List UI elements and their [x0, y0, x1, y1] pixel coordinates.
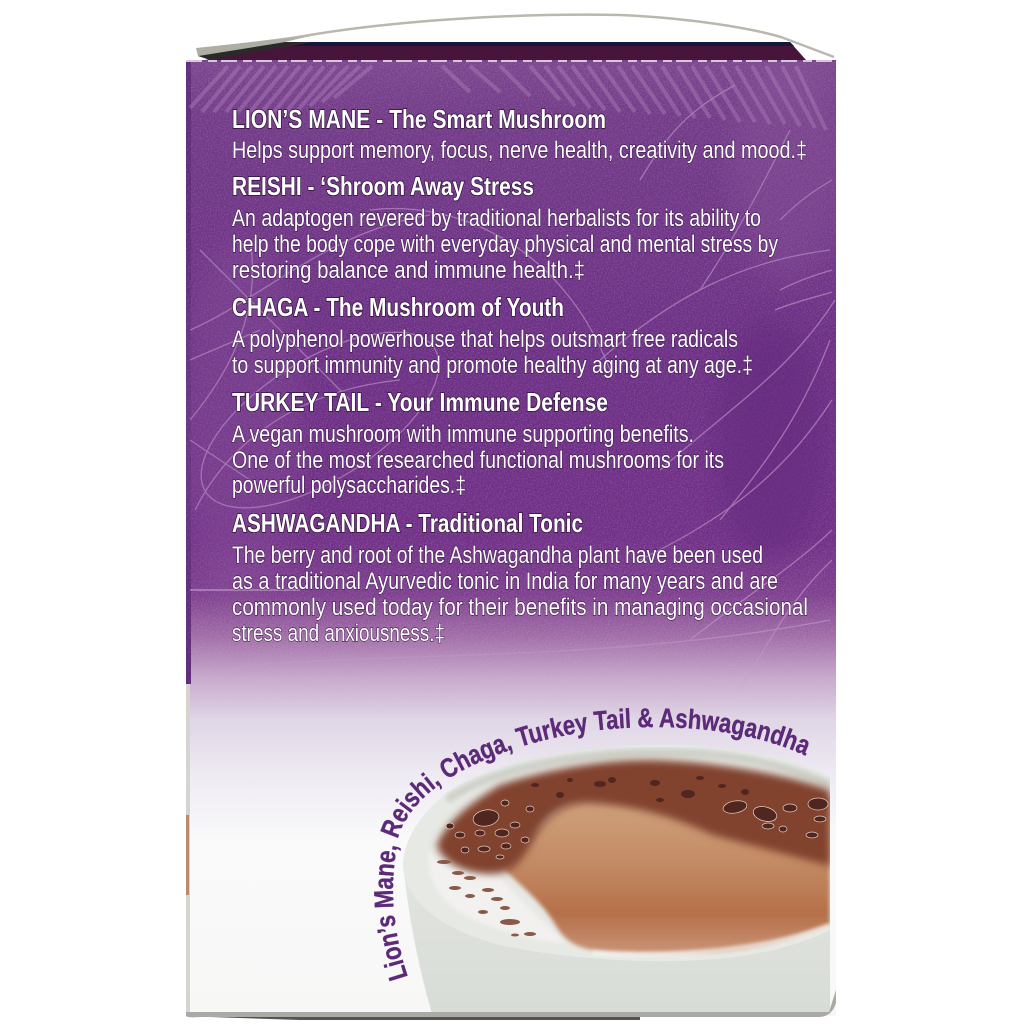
ingredient text	[232, 104, 808, 647]
bubbles	[446, 776, 828, 859]
Reishi body: restoring balance and immune health.‡	[232, 257, 585, 284]
Turkey Tail body: One of the most researched functional mushrooms for its	[232, 447, 724, 474]
background swirl pattern	[174, 60, 850, 702]
Chaga body: A polyphenol powerhouse that helps outsmart free radicals	[232, 326, 738, 353]
Ashwagandha body: The berry and root of the Ashwagandha plant have been used	[232, 542, 763, 569]
curved ingredient label: Lion’s Mane, Reishi, Chaga, Turkey Tail & Ashwagandha	[374, 708, 809, 982]
Chaga heading: CHAGA - The Mushroom of Youth	[232, 292, 564, 322]
Reishi body	[232, 205, 779, 284]
rim top shadow	[447, 752, 830, 800]
Ashwagandha body: stress and anxiousness.‡	[232, 620, 445, 647]
cup body	[404, 776, 830, 1014]
Turkey Tail body: A vegan mushroom with immune supporting benefits.	[232, 421, 694, 448]
cup	[403, 745, 832, 1014]
froth bubbles	[437, 860, 536, 936]
milk froth	[430, 856, 560, 941]
box top flap	[196, 15, 834, 60]
Turkey Tail body	[232, 421, 724, 499]
Ashwagandha body: as a traditional Ayurvedic tonic in India for many years and are	[232, 568, 778, 595]
cup rim	[403, 745, 830, 961]
box back panel	[186, 60, 836, 1016]
Lion's Mane heading: LION’S MANE - The Smart Mushroom	[232, 104, 606, 134]
coffee surface	[505, 796, 830, 953]
Reishi heading: REISHI - ‘Shroom Away Stress	[232, 171, 534, 201]
box bottom edge	[186, 990, 836, 1020]
Chaga body: to support immunity and promote healthy aging at any age.‡	[232, 352, 753, 379]
Lion's Mane body: Helps support memory, focus, nerve health, creativity and mood.‡	[232, 137, 807, 164]
Reishi body: An adaptogen revered by traditional herbalists for its ability to	[232, 205, 761, 232]
Ashwagandha body: commonly used today for their benefits in managing occasional	[232, 594, 808, 621]
cup rim highlight	[593, 925, 830, 954]
Ashwagandha body	[232, 542, 808, 647]
Chaga body	[232, 326, 753, 379]
Ashwagandha heading: ASHWAGANDHA - Traditional Tonic	[232, 508, 583, 538]
Reishi body: help the body cope with everyday physical and mental stress by	[232, 231, 779, 258]
Turkey Tail body: powerful polysaccharides.‡	[232, 472, 466, 499]
dark foam ring	[437, 760, 830, 874]
Turkey Tail heading: TURKEY TAIL - Your Immune Defense	[232, 387, 608, 417]
